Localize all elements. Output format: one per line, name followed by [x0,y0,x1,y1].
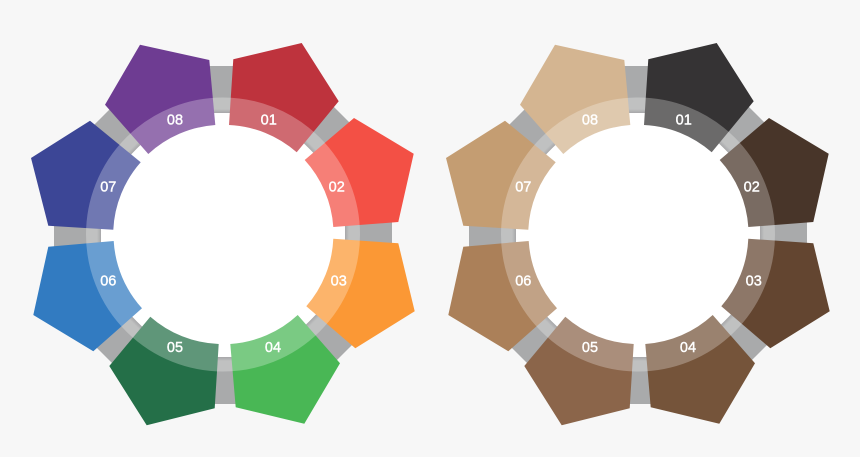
step numbers: 08 [167,113,183,129]
step numbers, right wheel: 04 [680,340,696,356]
segment 01 [229,43,339,152]
segment 05 [109,317,219,425]
segment 05, right wheel [524,317,634,425]
step numbers: 05 [167,340,183,356]
step numbers [100,113,347,356]
step numbers, right wheel: 01 [676,113,692,129]
step numbers, right wheel: 07 [515,179,531,195]
step numbers: 02 [329,179,345,195]
segment 08, right wheel [520,45,630,154]
diagram: colourful wheel [31,43,415,425]
segment 04 [230,315,340,424]
segment 03, right wheel [721,239,830,348]
connectors: grey ring links, right wheel [469,66,807,404]
step numbers, right wheel: 08 [582,113,598,129]
segment 07 [31,121,141,230]
segment 02, right wheel [720,118,829,227]
segment 08 [105,45,215,154]
step numbers: 03 [331,274,347,290]
step numbers: 07 [100,179,116,195]
step numbers, right wheel: 02 [744,179,760,195]
step numbers, right wheel: 06 [515,274,531,290]
segment 04, right wheel [645,315,755,424]
segment 03 [306,239,415,348]
step numbers, right wheel: 05 [582,340,598,356]
segment 07, right wheel [446,121,556,230]
segment 06, right wheel [448,241,557,351]
step numbers: 06 [100,274,116,290]
segment 06 [33,241,142,351]
translucent band [100,112,346,357]
step numbers, right wheel: 03 [746,274,762,290]
segment 01, right wheel [644,43,754,152]
centre disc, right wheel [516,113,760,357]
connectors: grey ring links [54,66,392,404]
centre disc [101,113,345,357]
diagram: brown wheel [446,43,830,425]
segment 02 [305,118,414,227]
step numbers: 01 [261,113,277,129]
translucent band, right wheel [516,112,760,357]
step numbers: 04 [265,340,281,356]
step numbers, right wheel [515,113,762,356]
